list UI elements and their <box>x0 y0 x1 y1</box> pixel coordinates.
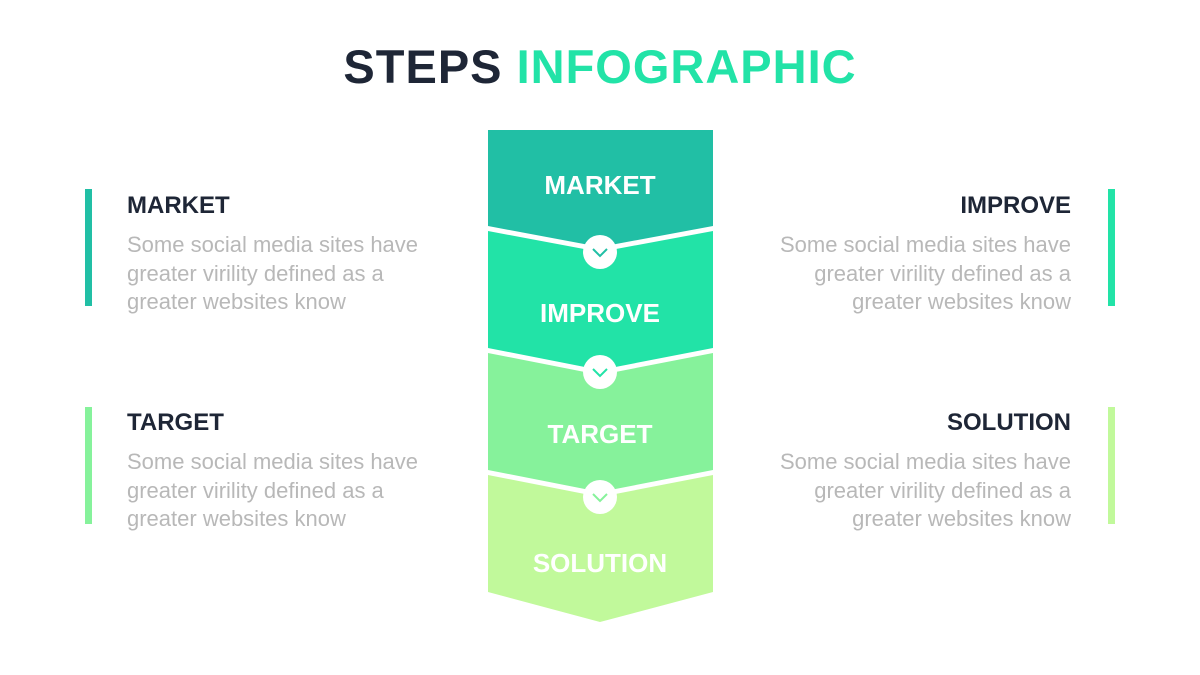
icon: chevron circle 3 <box>583 480 617 514</box>
text block: market: Some social media sites have greater virility defined as a greater websites know <box>127 232 418 314</box>
text block: solution: SOLUTION <box>947 409 1071 436</box>
text block: improve <box>780 192 1071 314</box>
step: improve: IMPROVE <box>540 298 660 328</box>
text block: solution: Some social media sites have greater virility defined as a greater websites know <box>780 449 1071 531</box>
step: solution <box>488 475 713 622</box>
step: solution: SOLUTION <box>533 548 667 578</box>
icon: chevron circle 2 <box>583 355 617 389</box>
text block: improve: Some social media sites have greater virility defined as a greater websites know <box>780 232 1071 314</box>
step: target: TARGET <box>548 419 653 449</box>
text block: market <box>127 192 418 314</box>
accent bar: target <box>85 407 92 524</box>
step: market: MARKET <box>544 170 656 200</box>
text block: target <box>127 409 418 531</box>
step: target <box>488 353 713 492</box>
step: market <box>488 130 713 247</box>
text block: target: Some social media sites have greater virility defined as a greater websites know <box>127 449 418 531</box>
text block: solution <box>780 409 1071 531</box>
title: STEPS INFOGRAPHIC <box>343 40 857 93</box>
accent bar: market <box>85 189 92 306</box>
icon: chevron circle 1 <box>583 235 617 269</box>
text block: target: TARGET <box>127 409 224 436</box>
accent bar: improve <box>1108 189 1115 306</box>
step: improve <box>488 231 713 370</box>
text block: market: MARKET <box>127 192 230 219</box>
accent bar: solution <box>1108 407 1115 524</box>
text block: improve: IMPROVE <box>960 192 1071 219</box>
